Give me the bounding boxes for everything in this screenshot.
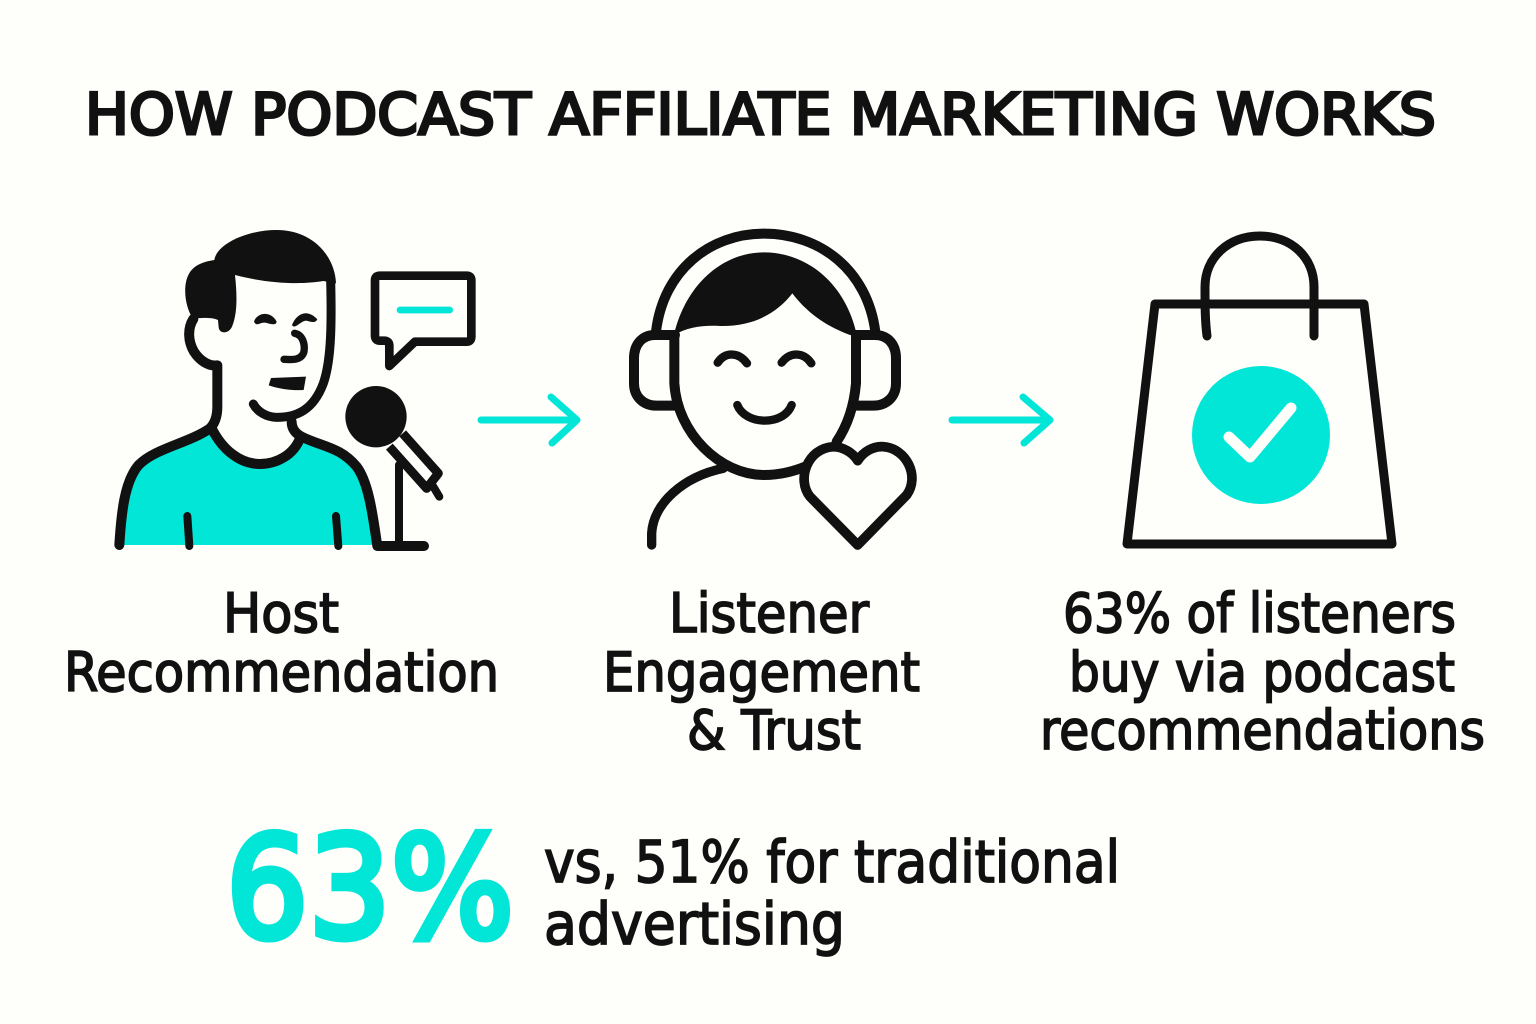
icon: smiling listener with headphones and heart [634,234,912,545]
label: host recommendation: Host [223,582,339,645]
label: 63% of listeners buy via podcast recommendations: 63% of listeners [1063,582,1456,645]
label: listener engagement and trust: Listener [669,582,870,645]
label: host recommendation [64,582,499,704]
label: 63% of listeners buy via podcast recommendations [1040,582,1485,762]
label: listener engagement and trust: Engagement [603,641,920,704]
label: host recommendation: Recommendation [64,641,499,704]
callout: 63% vs 51% statistic [226,807,1120,971]
arrow: host to listener [481,397,577,443]
icon: shopping bag with check mark [1127,236,1392,544]
panel: host recommendation [64,230,499,704]
label: listener engagement and trust [603,582,920,762]
panel: purchase [1040,236,1485,762]
big number 63%: 63% [226,807,514,971]
label: 63% of listeners buy via podcast recommendations: buy via podcast [1069,641,1455,704]
icon: podcast host with microphone and speech bubble [119,230,471,546]
title: HOW PODCAST AFFILIATE MARKETING WORKS [85,82,1436,148]
panel: listener engagement [603,234,920,762]
label: listener engagement and trust: & Trust [687,699,861,762]
comparison text: advertising [544,890,845,958]
comparison text [544,828,1120,958]
comparison text: vs, 51% for traditional [544,828,1120,896]
arrow: listener to purchase [952,397,1050,443]
label: 63% of listeners buy via podcast recommendations: recommendations [1040,699,1485,762]
